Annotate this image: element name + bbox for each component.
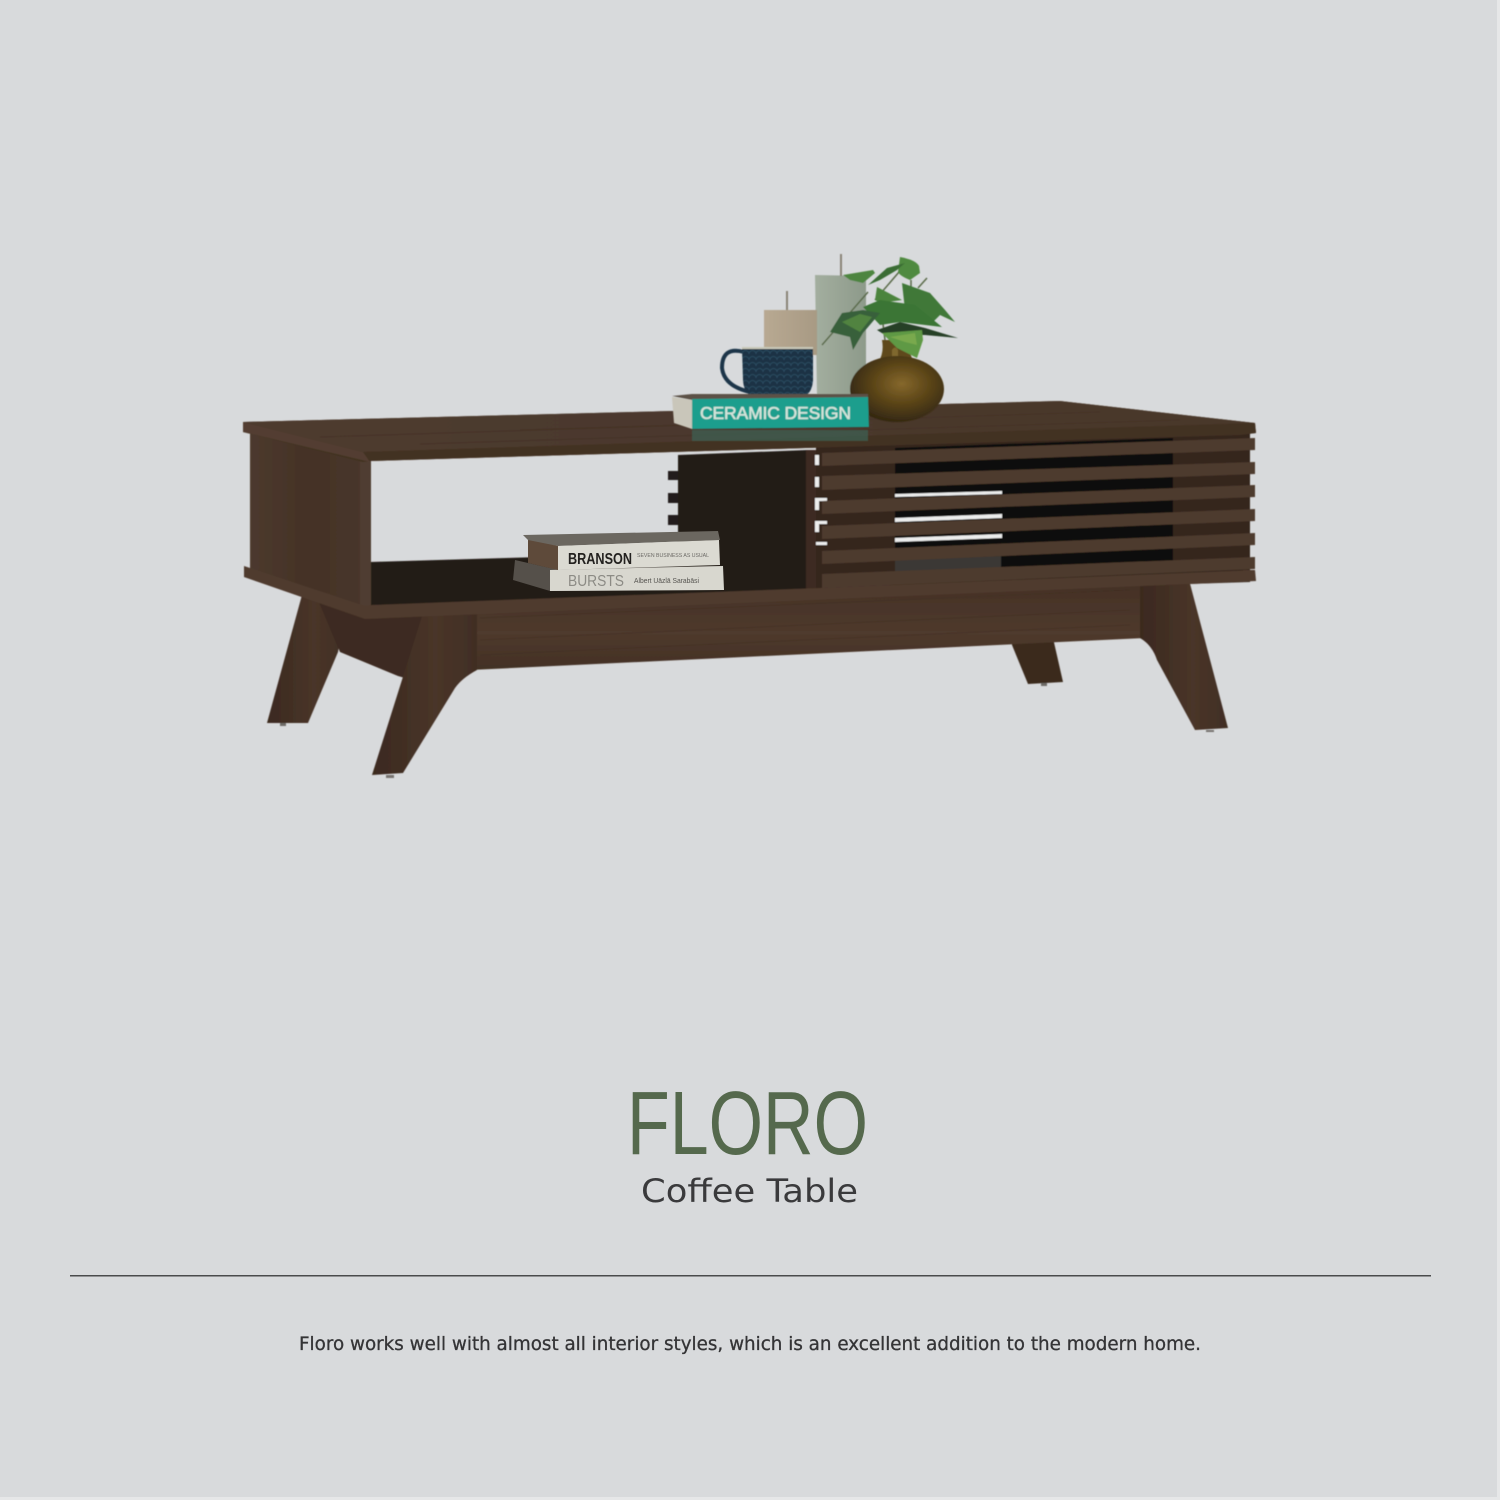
title: FLORO: FLORO (627, 1074, 868, 1174)
slatted door (815, 428, 1255, 596)
blue mug (722, 347, 813, 397)
centre dark compartment (668, 450, 818, 594)
subtitle: Coffee Table: Coffee Table (641, 1172, 858, 1210)
left rear leg (267, 595, 345, 726)
shelf back opening (370, 553, 820, 608)
front left leg (372, 608, 477, 778)
wood grain lines (320, 412, 1180, 655)
lower book (513, 560, 724, 591)
description text: Floro works well with almost all interior styles, which is an excellent addition to the modern home. (299, 1333, 1201, 1355)
tabletop decor (672, 254, 958, 441)
brass vase (850, 340, 944, 422)
lower book: BURSTS (568, 573, 624, 590)
bottom board (244, 566, 1256, 619)
left side panel (250, 428, 371, 612)
apron rail (470, 578, 1145, 670)
tan candle (764, 291, 817, 355)
coffee table illustration (243, 401, 1256, 778)
divider line (70, 1275, 1431, 1276)
upper book: SEVEN BUSINESS AS USUAL (637, 553, 709, 559)
green candle (815, 254, 866, 395)
lower book: Albert Uāzlā Sarabāsi (634, 576, 699, 585)
table top (243, 401, 1256, 655)
book: Ceramic Design (672, 394, 869, 441)
front right leg (1140, 576, 1228, 732)
shelf books (513, 531, 724, 591)
door shadow backing (816, 428, 1250, 596)
upper book: BRANSON (568, 551, 632, 568)
slats (822, 438, 1255, 588)
plant leaves (822, 257, 958, 358)
right rear leg (1012, 638, 1063, 686)
side rail (318, 600, 432, 680)
upper book (523, 531, 720, 570)
right end foot (1243, 570, 1255, 582)
white gaps (815, 455, 1002, 545)
book: Ceramic Design: CERAMIC DESIGN (700, 403, 851, 423)
